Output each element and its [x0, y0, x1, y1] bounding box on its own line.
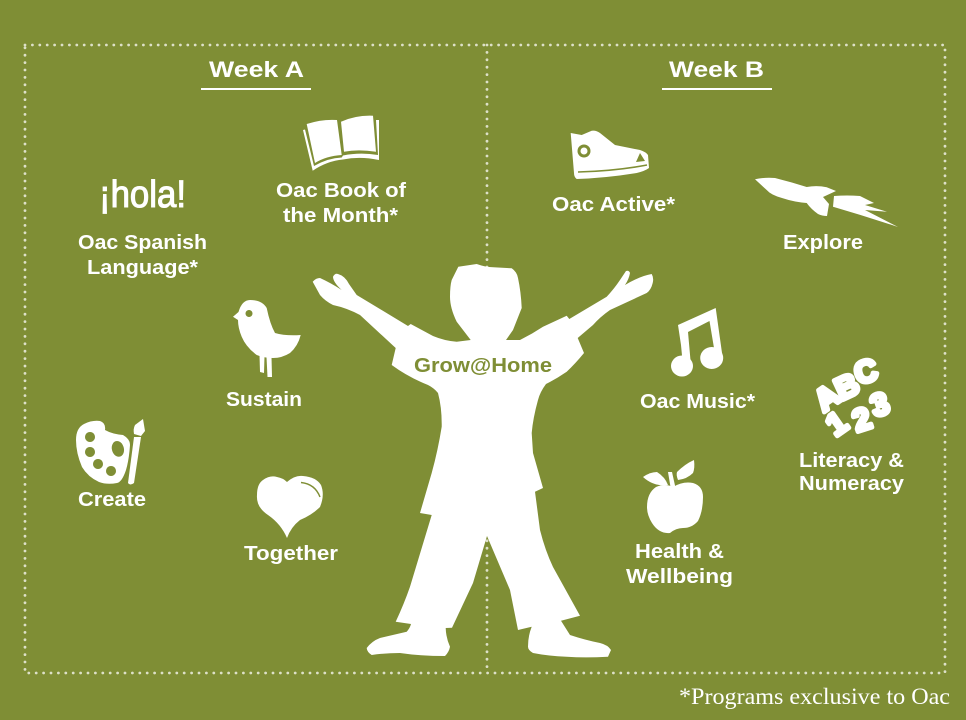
item: Literacy and Numeracy: Literacy & — [799, 450, 904, 472]
icon: ABC 123 blocks: A — [808, 377, 846, 418]
icon: heart — [257, 476, 323, 538]
heading: Week B: Week B — [669, 57, 764, 82]
item: Oac Active: Oac Active* — [552, 194, 675, 216]
heading: Week B — [662, 57, 772, 90]
heading: Week A: Week A — [209, 57, 304, 82]
item: Explore: Explore — [783, 232, 863, 254]
item: Sustain — [226, 300, 302, 411]
child silhouette with Grow@Home — [313, 264, 653, 657]
item: Create: Create — [78, 489, 146, 511]
icon: rocket — [755, 178, 898, 227]
item: Oac Music — [640, 308, 755, 413]
item: Oac Spanish Language — [78, 174, 207, 279]
item: Oac Book of the Month: the Month* — [283, 205, 398, 227]
icon: hola wordmark: ¡hola! — [99, 174, 186, 216]
icon: ABC 123 blocks: 2 — [848, 400, 875, 439]
item: Oac Spanish Language: Oac Spanish — [78, 232, 207, 254]
footnote: *Programs exclusive to Oac — [679, 684, 950, 709]
item: Oac Active — [552, 131, 675, 216]
item: Sustain: Sustain — [226, 389, 302, 411]
item: Health and Wellbeing: Wellbeing — [626, 566, 733, 588]
item: Together: Together — [244, 543, 338, 565]
item: Create — [76, 419, 146, 511]
item: Literacy and Numeracy: Numeracy — [799, 473, 905, 495]
icon: ABC 123 blocks: 1 — [820, 404, 854, 443]
item: Health and Wellbeing: Health & — [635, 541, 724, 563]
icon: bird — [233, 300, 301, 377]
item: Explore — [755, 178, 898, 254]
icon: ABC 123 blocks: 3 — [866, 385, 893, 424]
item: Oac Book of the Month — [276, 116, 406, 227]
item: Oac Music: Oac Music* — [640, 391, 755, 413]
label: Grow@Home: Grow@Home — [414, 355, 552, 377]
icon: ABC 123 blocks: B — [829, 366, 864, 407]
icon: ABC 123 blocks — [808, 352, 893, 443]
item: Literacy and Numeracy — [799, 352, 905, 495]
icon: sneaker — [571, 131, 649, 179]
item: Together — [244, 476, 338, 565]
item: Oac Book of the Month: Oac Book of — [276, 180, 406, 202]
item: Health and Wellbeing — [626, 460, 733, 588]
icon: palette and brush — [76, 419, 145, 484]
item: Oac Spanish Language: Language* — [87, 257, 198, 279]
icon: music notes — [671, 308, 723, 376]
icon: apple — [643, 460, 703, 533]
icon: open book — [303, 116, 379, 171]
icon: ABC 123 blocks: C — [851, 352, 881, 391]
heading: Week A — [201, 57, 311, 90]
